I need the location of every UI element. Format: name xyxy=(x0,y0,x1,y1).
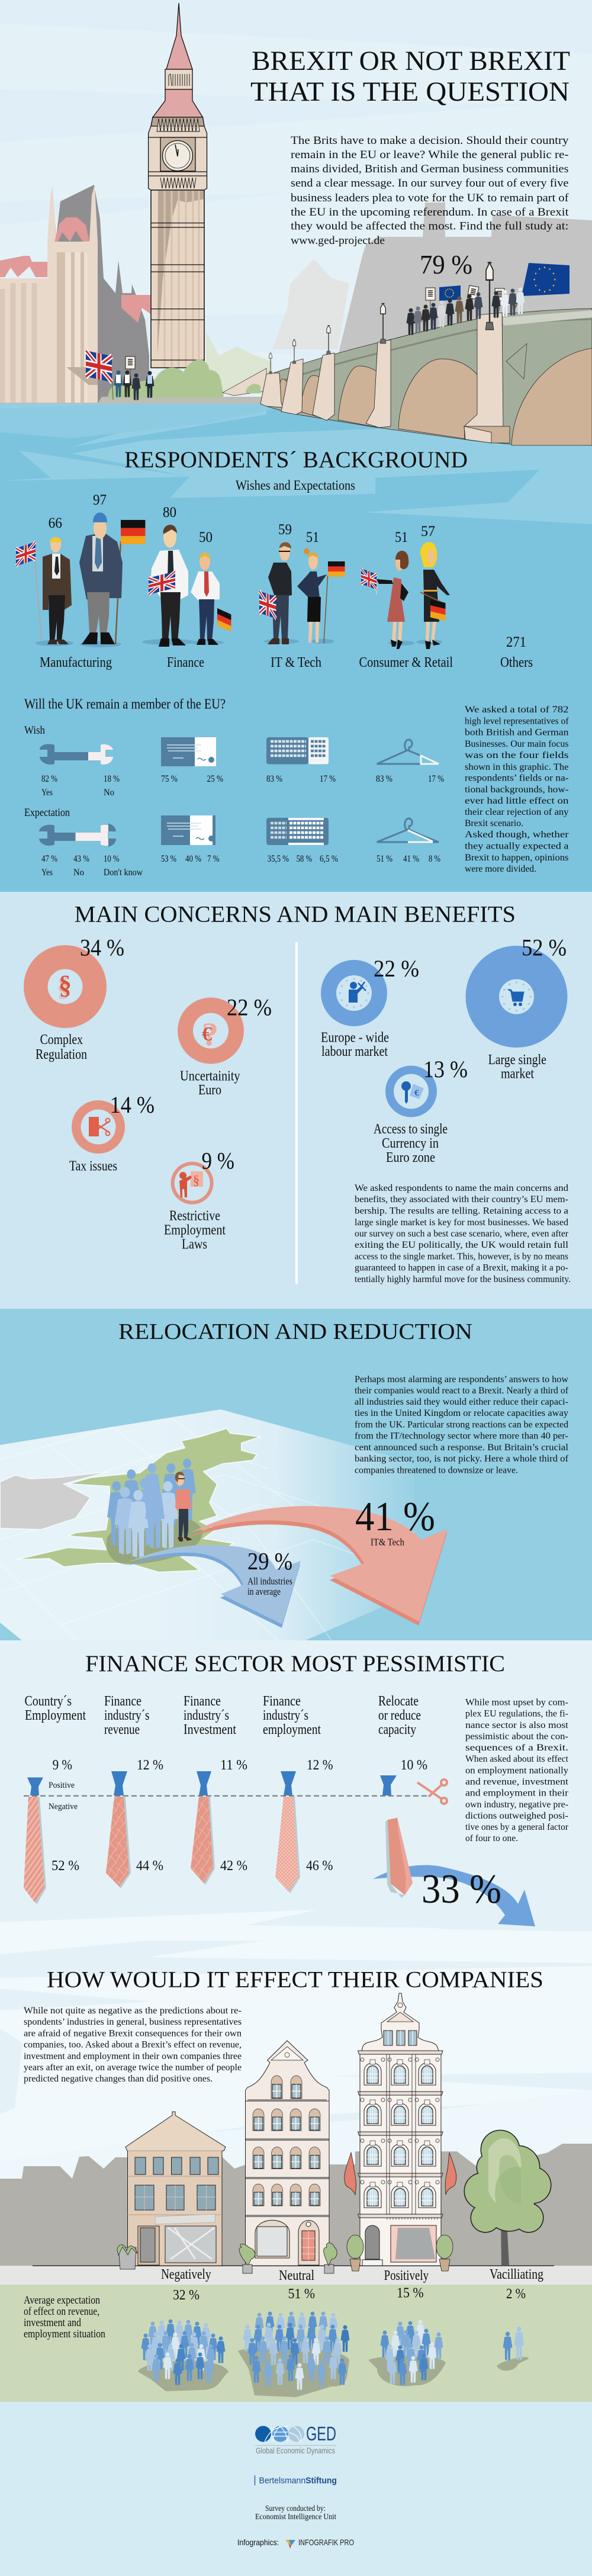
wish percentages: 17 % xyxy=(320,774,336,784)
benefit: labour market: 22 % xyxy=(374,955,419,982)
logo: GED: Global Economic Dynamics xyxy=(256,2446,335,2455)
benefit: single currency: € xyxy=(414,1088,419,1098)
concerns text: tentially highly harmful move for the business community. xyxy=(355,1274,571,1284)
EU membership question: Expectation xyxy=(24,807,70,819)
arrow: 33 percent xyxy=(373,1865,535,1926)
concerns text: access to the single market. This, however, is by no means xyxy=(355,1252,568,1261)
sector labels: IT & Tech xyxy=(271,655,321,670)
relocation text: ties in the United Kingdom or relocate capacities away xyxy=(355,1408,568,1418)
respondent numbers: 271 xyxy=(506,634,526,650)
concern: restrictive laws: 9 % xyxy=(201,1148,234,1174)
companies text: years after an exit, on average twice the number of people xyxy=(24,2063,242,2073)
street xyxy=(0,2266,592,2285)
companies text: predicted negative changes than did positive ones. xyxy=(24,2074,213,2084)
logo: GED: GED xyxy=(306,2423,336,2445)
crowd: vacillating xyxy=(497,2327,529,2371)
column labels: employment xyxy=(263,1722,321,1737)
house: neutral xyxy=(245,2041,329,2266)
respondent numbers: 57 xyxy=(421,523,435,539)
heading: respondents background: RESPONDENTS´ BACKGROUND xyxy=(124,447,468,473)
relocation text: cent announced such a response. But Britain’s crucial xyxy=(355,1443,569,1453)
expectation percentages: Don't know xyxy=(104,868,143,878)
finance text: tive ones by a general factor xyxy=(465,1822,569,1832)
concerns text: large single market is key for most businesses. We based xyxy=(355,1218,568,1228)
benefit: labour market: Europe - wide xyxy=(321,1030,389,1045)
tie: relocate top xyxy=(380,1758,427,1796)
expectation percentages: 51 % xyxy=(377,854,392,864)
stat: 79 percent: 79 % xyxy=(420,249,472,280)
effect percentages: 32 % xyxy=(173,2288,200,2303)
tie: finance employment: 12 % xyxy=(307,1758,333,1773)
intro text: mains divided, British and German business communities xyxy=(291,163,568,175)
concern: uncertainty euro xyxy=(178,994,272,1098)
column labels: Finance xyxy=(184,1694,221,1709)
title xyxy=(250,46,570,107)
column labels: Finance xyxy=(104,1694,141,1709)
expectation percentages: 35,5 % xyxy=(268,854,289,864)
figure: manufacturing 1 xyxy=(16,537,73,646)
left protesters with UK flag xyxy=(86,351,154,400)
map: Britain xyxy=(15,1428,261,1572)
icon: hanger expectation xyxy=(377,818,439,842)
benefit: single currency: Euro zone xyxy=(386,1150,435,1165)
figure: retail 1 xyxy=(361,551,414,649)
respondents text: their clear rejection of any xyxy=(465,807,568,817)
panel: green expectation band xyxy=(0,2285,592,2402)
big EU flag xyxy=(522,263,570,296)
crowd: neutral xyxy=(238,2312,349,2397)
wish percentages: 25 % xyxy=(207,774,223,784)
background: parliament xyxy=(0,185,150,403)
intro text: business leaders plea to vote for the UK to remain part of xyxy=(291,192,569,204)
intro text: www.ged-project.de xyxy=(291,235,385,247)
figure: finance 1 xyxy=(142,525,195,647)
column labels: industry´s xyxy=(263,1708,308,1723)
finance text: When asked about its effect xyxy=(465,1754,569,1764)
respondents text: We asked a total of 782 xyxy=(465,705,568,715)
icon: keyboard wish xyxy=(266,737,329,764)
finance text: own industry, negative pre- xyxy=(465,1800,568,1810)
effect labels: Neutral xyxy=(279,2268,314,2283)
column labels: capacity xyxy=(378,1722,416,1737)
figure: finance 2 xyxy=(191,553,231,645)
respondents text: both British and German xyxy=(465,728,568,738)
stat: 29 percent: 29 % xyxy=(247,1547,292,1575)
companies text: are afraid of negative Brexit consequences for their own xyxy=(24,2029,242,2038)
decorative banners xyxy=(345,2153,456,2195)
expectation percentages: 53 % xyxy=(161,854,176,864)
expectation text xyxy=(24,2294,105,2340)
respondents text: was on the four fields xyxy=(465,750,568,760)
tree xyxy=(465,2131,551,2265)
arrow: IT and tech xyxy=(190,1506,448,1626)
EU membership question: Will the UK remain a member of the EU? xyxy=(24,696,226,712)
relocation text: companies threatened to downsize or leave. xyxy=(355,1465,518,1475)
concerns text xyxy=(355,1183,571,1284)
finance text: nance sector is also most xyxy=(465,1720,569,1730)
map plane xyxy=(0,1409,414,1640)
expectation percentages: 7 % xyxy=(207,854,219,864)
concern: restrictive laws: Employment xyxy=(164,1222,226,1238)
respondents text: they actually expected a xyxy=(465,841,568,852)
wish percentages: 83 % xyxy=(376,774,392,784)
effect labels: Positively xyxy=(384,2268,429,2283)
concern: uncertainty euro: ? xyxy=(202,1016,218,1053)
title: BREXIT OR NOT BREXIT xyxy=(252,46,570,76)
concern: uncertainty euro: € xyxy=(202,1023,212,1045)
effect labels xyxy=(161,2267,543,2283)
panel: finance xyxy=(0,1640,592,2179)
respondents text: Brexit scenario. xyxy=(465,818,523,828)
crowd: positively xyxy=(368,2320,446,2386)
respondent numbers: 97 xyxy=(93,492,107,508)
column labels: Country´s xyxy=(25,1694,72,1709)
infographics credit: Infographics: xyxy=(237,2538,279,2547)
respondents text xyxy=(465,705,569,874)
stat: 29 percent: in average xyxy=(247,1586,281,1597)
companies text: spondents’ industries in general, business representatives xyxy=(24,2017,242,2027)
respondent numbers: 51 xyxy=(306,529,319,545)
benefit: single currency: Currency in xyxy=(382,1136,439,1151)
sector labels xyxy=(40,655,533,670)
house: negatively xyxy=(126,2112,226,2266)
respondent numbers xyxy=(49,492,526,650)
finance text xyxy=(465,1697,569,1843)
EU membership question: Wish xyxy=(24,724,45,737)
dashed axis and labels: Negative xyxy=(49,1802,78,1811)
concern: restrictive laws: Restrictive xyxy=(169,1208,220,1223)
concerns text: bership. The results are telling. Retaining access to a xyxy=(355,1206,568,1216)
expectation text: Average expectation xyxy=(24,2294,100,2307)
figure: retail 2 xyxy=(416,542,450,649)
benefit: single currency: 13 % xyxy=(423,1056,468,1083)
companies text: companies, too. Asked about a Brexit’s effect on revenue, xyxy=(24,2039,242,2050)
wish percentages: No xyxy=(104,788,114,798)
relocation text: Perhaps most alarming are respondents’ answers to how xyxy=(355,1374,568,1385)
wish percentages: 83 % xyxy=(266,774,282,784)
benefit: single currency xyxy=(374,1056,468,1165)
expectation percentages: 58 % xyxy=(297,854,312,864)
relocation text: all industries said they would either reduce their capaci- xyxy=(355,1397,568,1407)
intro text xyxy=(291,134,569,247)
column labels: Finance xyxy=(263,1694,301,1709)
stat: 41 percent: IT& Tech xyxy=(371,1536,404,1548)
sector labels: Finance xyxy=(167,655,204,670)
concern: restrictive laws: Laws xyxy=(182,1237,207,1252)
relocation text: their companies would react to a Brexit. Nearly a third of xyxy=(355,1386,569,1396)
respondents text: Asked though, whether xyxy=(465,830,569,840)
crowd: negatively xyxy=(138,2319,229,2391)
finance text: sequences of a Brexit. xyxy=(465,1743,568,1753)
finance text: pessimistic about the con- xyxy=(465,1732,568,1742)
background: sky xyxy=(0,0,592,415)
tie: country employment: 9 % xyxy=(53,1758,72,1773)
bridge crowd with EU flags xyxy=(406,263,570,335)
expectation percentages: 8 % xyxy=(429,854,440,864)
tie: finance revenue xyxy=(106,1758,163,1888)
arrow: all industries xyxy=(128,1545,301,1628)
Big Ben tower xyxy=(149,3,207,368)
stat: 29 percent: All industries xyxy=(247,1576,292,1587)
concern: complex regulation: § xyxy=(59,971,72,1000)
concerns text: exiting the EU politically, the UK would retain full xyxy=(355,1240,569,1250)
column labels: Investment xyxy=(184,1722,236,1737)
concern: uncertainty euro: Euro xyxy=(198,1083,221,1098)
expectation percentages: 43 % xyxy=(73,854,89,864)
tie: finance revenue: 12 % xyxy=(137,1758,163,1773)
highlighted coral person xyxy=(175,1472,192,1541)
intro text: send a clear message. In our survey four out of every five xyxy=(291,177,568,189)
figure: IT 2 xyxy=(297,548,345,644)
expectation percentages xyxy=(41,854,440,878)
heading: main concerns: MAIN CONCERNS AND MAIN BENEFITS xyxy=(75,901,516,927)
intro text: The Brits have to make a decision. Should their country xyxy=(291,134,569,147)
icon: wrench wish xyxy=(40,744,113,765)
column labels: Relocate xyxy=(378,1694,419,1709)
icon: scissors xyxy=(417,1780,447,1804)
concerns text: guaranteed to happen in case of a Brexit, making it a po- xyxy=(355,1263,568,1273)
wish percentages: Yes xyxy=(41,788,53,798)
tie: finance employment xyxy=(275,1758,333,1893)
heading: relocation: RELOCATION AND REDUCTION xyxy=(118,1319,472,1344)
respondents text: shown in this graphic. The xyxy=(465,762,568,772)
effect percentages: 2 % xyxy=(506,2286,526,2302)
effect labels: Vacilliating xyxy=(490,2267,543,2282)
sector labels: Others xyxy=(500,655,533,670)
effect percentages: 51 % xyxy=(288,2286,315,2302)
respondent numbers: 51 xyxy=(395,529,408,545)
concern: complex regulation: § xyxy=(57,972,70,1001)
effect percentages: 15 % xyxy=(397,2286,424,2301)
column labels: industry´s xyxy=(184,1708,229,1723)
respondent numbers: 66 xyxy=(49,515,62,531)
companies text xyxy=(24,2006,242,2084)
finance text: While most upset by com- xyxy=(465,1697,568,1707)
finance text: plex EU regulations, the fi- xyxy=(465,1709,568,1719)
stat: 33 percent: 33 % xyxy=(422,1867,501,1912)
benefit: large single market: Large single xyxy=(488,1052,546,1068)
logo: Bertelsmann: BertelsmannStiftung xyxy=(259,2475,337,2486)
tie: cut lower part xyxy=(385,1818,413,1898)
expectation percentages: 6,5 % xyxy=(320,854,338,864)
relocation text: banking sector, too, is not picky. Here a whole third of xyxy=(355,1454,569,1464)
intro text: the EU in the upcoming referendum. In case of a Brexit xyxy=(291,206,569,219)
background: grey skyline behind bridge xyxy=(272,203,592,355)
wish percentages: 75 % xyxy=(161,774,178,784)
concern: uncertainty euro: 22 % xyxy=(227,994,272,1021)
concern: tax issues: Tax issues xyxy=(69,1158,117,1174)
column labels: or reduce xyxy=(378,1708,421,1723)
benefit: large single market: 52 % xyxy=(522,934,567,961)
concern: tax issues xyxy=(69,1091,155,1174)
background: trees and buildings xyxy=(159,332,272,397)
stat: 41 percent: 41 % xyxy=(355,1494,435,1540)
heading: finance: FINANCE SECTOR MOST PESSIMISTIC xyxy=(85,1651,505,1676)
panel: concerns and benefits xyxy=(0,892,592,1309)
respondents text: respondents’ fields or na- xyxy=(465,773,568,783)
companies text: While not quite as negative as the predictions about re- xyxy=(24,2006,242,2016)
crowd on map xyxy=(107,1459,202,1565)
respondents text: high level representatives of xyxy=(465,717,569,727)
background: street skyline xyxy=(0,2144,592,2266)
intro text: remain in the EU or leave? While the general public re- xyxy=(291,149,568,161)
expectation percentages: Yes xyxy=(41,868,53,878)
concern: tax issues: 14 % xyxy=(110,1091,155,1118)
companies text: investment and employment in their own companies three xyxy=(24,2051,242,2061)
respondent numbers: 80 xyxy=(163,505,176,521)
concern: restrictive laws: § xyxy=(193,1173,200,1187)
expectation percentages: No xyxy=(73,868,84,878)
finance text: of four to one. xyxy=(465,1833,518,1843)
tie: finance investment: 42 % xyxy=(220,1858,247,1874)
tie: finance revenue: 44 % xyxy=(136,1858,163,1874)
survey credit: Economist Intelligence Unit xyxy=(255,2513,336,2522)
tie: finance investment: 11 % xyxy=(220,1758,247,1773)
heading: companies: HOW WOULD IT EFFECT THEIR COMPANIES xyxy=(47,1967,543,1992)
left ground and bushes xyxy=(0,359,266,407)
icon: hanger wish xyxy=(377,740,439,764)
icon: wrench expectation xyxy=(39,823,116,847)
column labels: industry´s xyxy=(104,1708,149,1723)
EU membership question xyxy=(24,696,226,819)
finance text: dictions outweighed posi- xyxy=(465,1811,568,1821)
effect labels: Negatively xyxy=(161,2267,211,2282)
sector labels: Consumer & Retail xyxy=(359,655,453,670)
tie: finance investment xyxy=(191,1758,247,1885)
dashed axis and labels: Positive xyxy=(49,1781,75,1790)
survey credit: Survey conducted by: xyxy=(265,2504,326,2513)
expectation percentages: 47 % xyxy=(41,854,57,864)
wish percentages: 18 % xyxy=(104,774,120,784)
logo: GED xyxy=(255,2423,336,2455)
respondent numbers: 50 xyxy=(199,529,213,545)
tie: country employment xyxy=(24,1758,79,1904)
concerns text: our survey on such a best case scenario, where, even after xyxy=(355,1229,569,1239)
relocation text: from the UK. Particular strong reactions can be expected xyxy=(355,1420,568,1430)
panel: relocation xyxy=(0,1309,592,1640)
plants xyxy=(117,2235,453,2273)
benefit: single currency: Access to single xyxy=(374,1122,448,1137)
expectation percentages: 10 % xyxy=(104,854,120,864)
effect percentages xyxy=(173,2286,526,2303)
title: THAT IS THE QUESTION xyxy=(250,76,570,107)
icon: keyboard expectation xyxy=(266,818,329,845)
dashed axis and labels xyxy=(24,1781,430,1811)
sector labels: Manufacturing xyxy=(40,655,112,670)
column labels: revenue xyxy=(104,1722,140,1737)
concern: restrictive laws xyxy=(164,1148,234,1252)
icon: certificate wish xyxy=(161,737,216,766)
Westminster Bridge xyxy=(223,262,592,445)
column labels: Employment xyxy=(25,1708,86,1723)
panel: footer xyxy=(0,2402,592,2576)
benefit: labour market xyxy=(321,955,419,1059)
benefit: labour market: labour market xyxy=(321,1044,388,1059)
finance text: on employment nationally xyxy=(465,1766,568,1775)
map: Ireland xyxy=(0,1472,110,1530)
concern: complex regulation: Complex xyxy=(40,1032,83,1048)
heading: respondents background xyxy=(124,447,468,493)
benefit: large single market: market xyxy=(501,1067,534,1082)
relocation text: from the IT/technology sector where more than 40 per- xyxy=(355,1431,568,1441)
figure: manufacturing 2 xyxy=(79,513,145,647)
tie: relocate top: 10 % xyxy=(401,1758,427,1773)
concerns text: benefits, they associated with their country’s EU mem- xyxy=(355,1194,568,1205)
icon: certificate expectation xyxy=(161,815,215,845)
respondents text: were more divided. xyxy=(465,864,536,874)
tie: finance employment: 46 % xyxy=(306,1858,333,1874)
finance text: and revenue, investment xyxy=(465,1777,569,1787)
stat: 29 percent xyxy=(247,1547,292,1597)
concern: uncertainty euro: Uncertainity xyxy=(180,1068,240,1084)
wish percentages: 82 % xyxy=(41,774,57,784)
survey credit xyxy=(255,2504,336,2522)
wish percentages: 17 % xyxy=(428,774,444,784)
finance text: and employment in their xyxy=(465,1788,569,1798)
tie: country employment: 52 % xyxy=(52,1858,79,1874)
infographics credit: INFOGRAFIK PRO xyxy=(298,2538,354,2547)
expectation text: of effect on revenue, xyxy=(24,2305,99,2318)
concern: complex regulation: Regulation xyxy=(36,1047,87,1062)
expectation text: investment and xyxy=(24,2317,81,2329)
respondents text: ever had little effect on xyxy=(465,796,568,806)
respondents text: tional backgrounds, how- xyxy=(465,785,568,795)
respondents text: Businesses. Our main focus xyxy=(465,739,568,749)
figure: IT 1 xyxy=(259,542,299,644)
intro text: they would be affected the most. Find the full study at: xyxy=(291,220,568,232)
relocation text xyxy=(355,1374,569,1475)
expectation percentages: 41 % xyxy=(403,854,419,864)
respondents text: Brexit to happen, opinions xyxy=(465,853,568,863)
wish percentages xyxy=(41,774,444,798)
expectation text: employment situation xyxy=(24,2328,105,2340)
infographics credit xyxy=(237,2538,354,2549)
column labels xyxy=(25,1694,421,1737)
heading: respondents background: Wishes and Expectations xyxy=(236,478,355,493)
respondent numbers: 59 xyxy=(278,522,292,538)
background: water xyxy=(0,404,592,892)
concern: complex regulation xyxy=(24,934,124,1062)
concerns text: We asked respondents to name the main concerns and xyxy=(355,1183,568,1193)
benefit: large single market xyxy=(465,934,567,1082)
house: positively xyxy=(358,1993,443,2266)
expectation percentages: 40 % xyxy=(185,854,201,864)
concern: complex regulation: 34 % xyxy=(80,934,124,961)
